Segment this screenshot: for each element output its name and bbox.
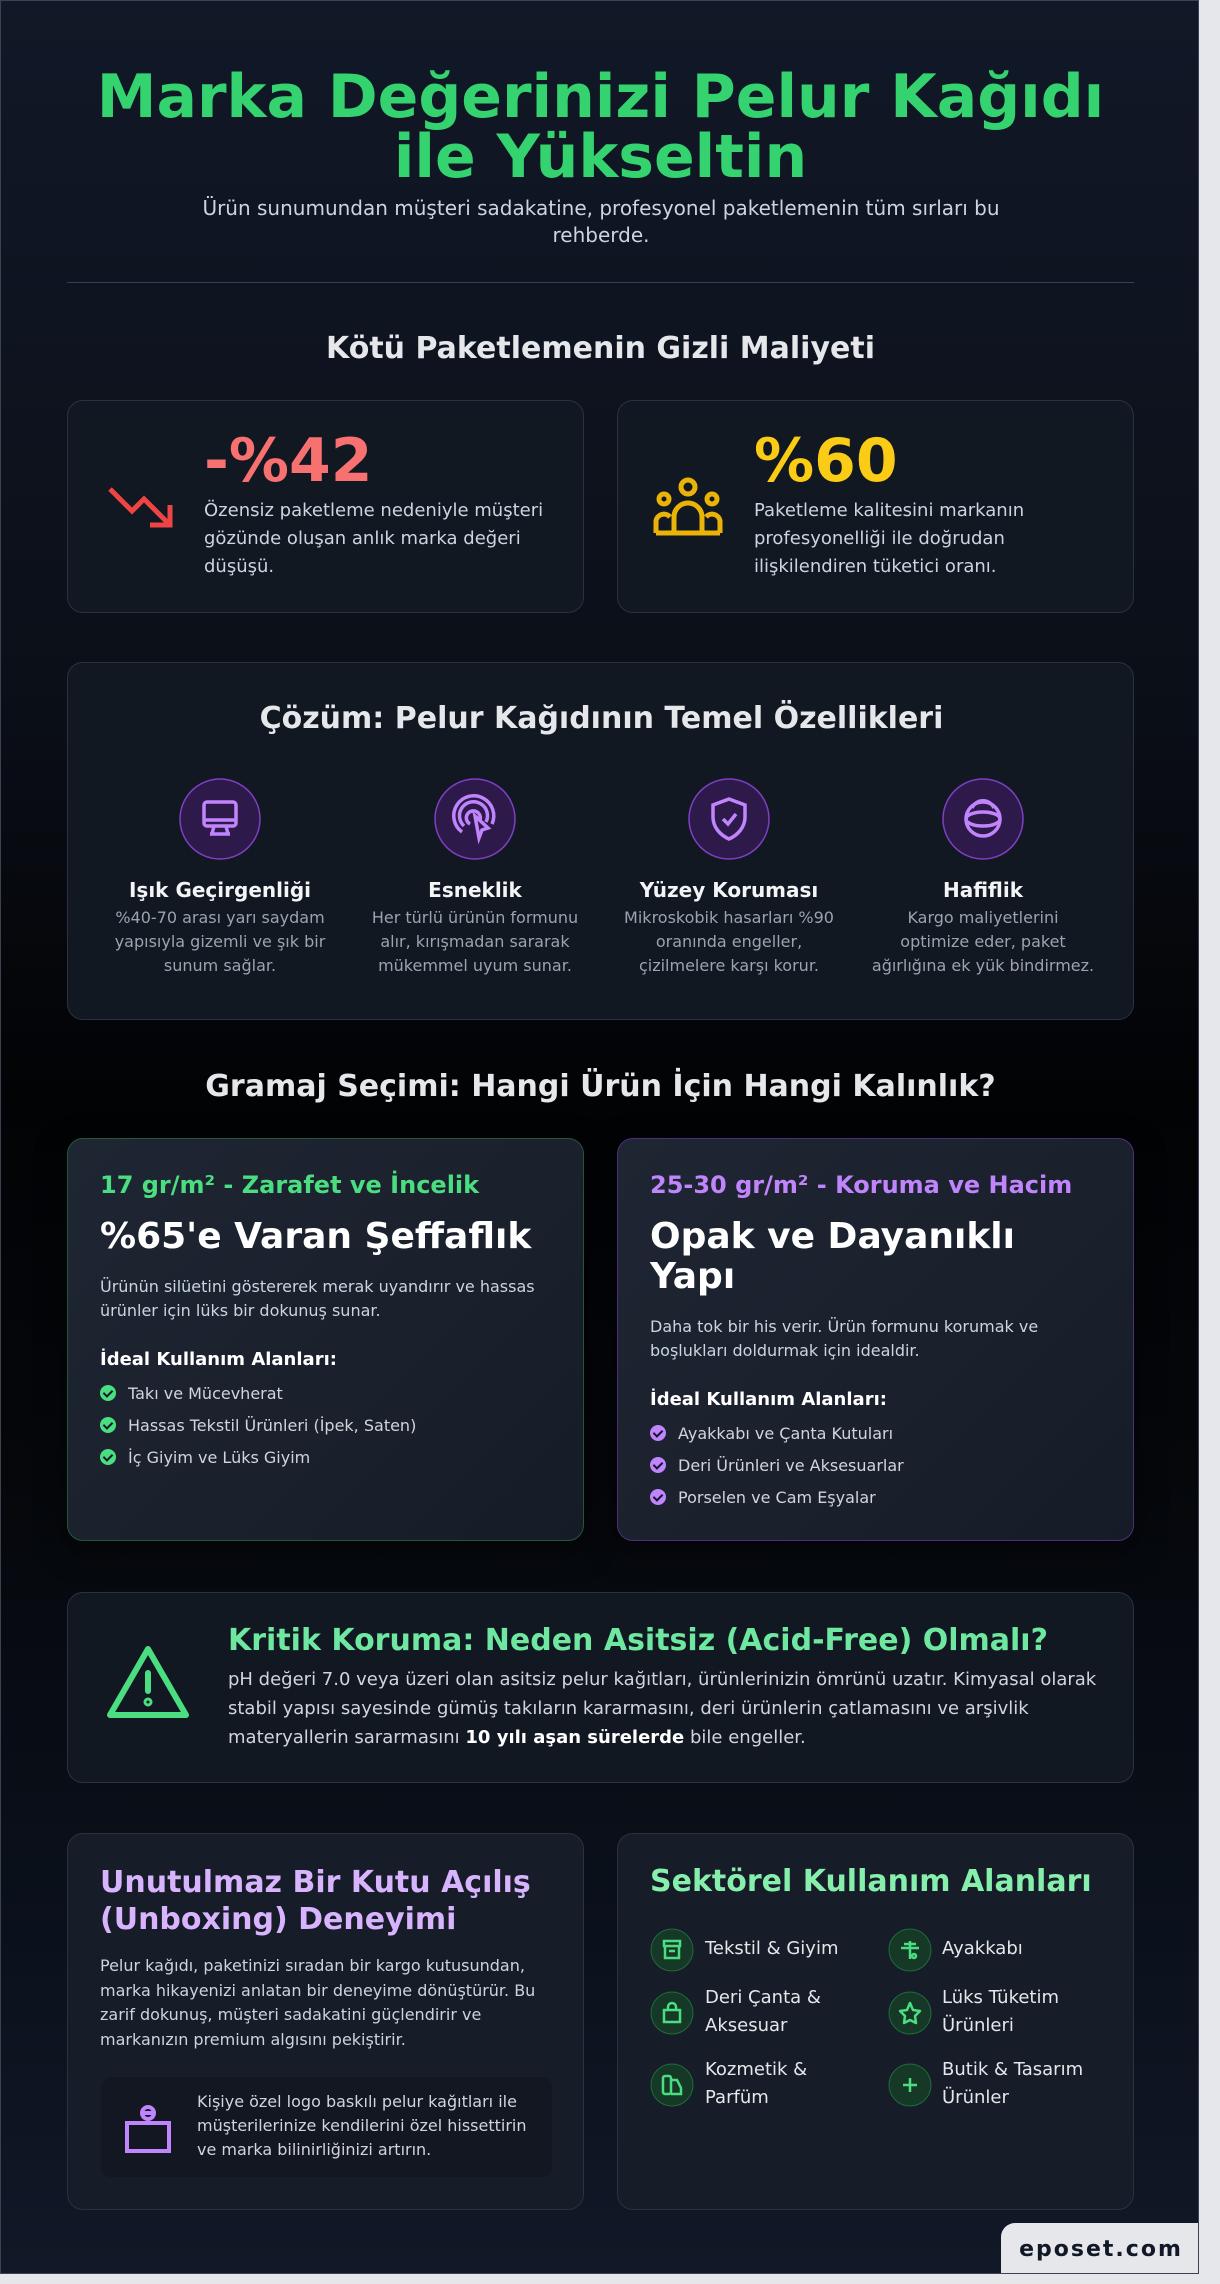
subtitle green: 17 gr/m² - Zarafet ve İncelik [100,1171,479,1199]
badge: eposet.com: eposet.com [1019,2237,1183,2262]
icon: trending down [108,487,172,528]
sector items: Ürünler [942,2087,1009,2108]
card: -42% [67,400,584,613]
subtitle: Ürün sunumundan müşteri sadakatine, profesyonel paketlemenin tüm sırları bu rehberde. [202,196,1000,247]
sector items: Kozmetik & [705,2059,807,2080]
sector items: Ürünleri [942,2015,1014,2036]
card: unboxing [67,1833,584,2210]
feature: flex: Her türlü ürünün formunu alır, kırışmadan sararak mükemmel uyum sunar. [372,908,578,975]
feature: light weight: ağırlığına ek yük bindirmez. [872,956,1094,975]
list [100,1384,416,1467]
title [97,62,1104,192]
feature: surface: Mikroskobik hasarları %90 oranında engeller, çizilmelere karşı korur. [624,908,834,975]
card: 25-30 gsm: İdeal Kullanım Alanları: [650,1389,887,1410]
feature: light weight: Kargo maliyetlerini [907,908,1059,927]
text: Kritik Koruma: Neden Asitsiz (Acid-Free) Olmalı? [228,1623,1048,1658]
sector items: Deri Çanta & [705,1987,821,2008]
title: Marka Değerinizi Pelur Kağıdı [97,62,1104,132]
feature: light weight [872,778,1094,975]
panel: acid-free [67,1592,1134,1783]
list: İç Giyim ve Lüks Giyim [128,1448,310,1467]
feature: flex: Esneklik [428,878,522,902]
badge: eposet.com [1001,2223,1201,2276]
sector items: Tekstil & Giyim [705,1938,838,1959]
feature: surface [624,778,834,975]
card: 25-30 gsm: Opak ve Dayanıklı [650,1216,1015,1257]
icon: warning [107,1646,189,1718]
feature: surface: Yüzey Koruması [640,878,818,902]
card: sectors [617,1833,1134,2210]
sector items [650,1928,1083,2108]
text: pH değeri 7.0 veya üzeri olan asitsiz pelur kağıtları, ürünlerinizin ömrünü uzatır. Kimyasal olarak stabil yapısı sayesinde gümüş takıların kararmasını, deri ürünlerin çatlamasını ve arşivlik materyallerin sararmasını 10 yılı aşan sürelerde bile engeller. [228,1669,1096,1748]
heading: grammage: Gramaj Seçimi: Hangi Ürün İçin Hangi Kalınlık? [205,1069,996,1104]
card: 25-30 gsm: Ayakkabı ve Çanta Kutuları [678,1424,893,1443]
feature: light: %40-70 arası yarı saydam yapısıyla gizemli ve şık bir sunum sağlar. [115,908,325,975]
sector items: Aksesuar [705,2015,787,2036]
callout: logo printing: Kişiye özel logo baskılı pelur kağıtları ile müşterilerinize kendilerini özel hissettirin ve marka bilinirliğinizi artırın. [197,2092,527,2159]
feature: light weight: optimize eder, paket [900,932,1066,951]
stat text: -%42 [204,426,373,496]
list: Takı ve Mücevherat [128,1384,283,1403]
card: 60% [617,400,1134,613]
card: 25-30 gsm: Daha tok bir his verir. Ürün formunu korumak ve boşlukları doldurmak için idealdir. [650,1317,1038,1360]
sector items: Lüks Tüketim [942,1987,1059,2008]
list: Hassas Tekstil Ürünleri (İpek, Saten) [128,1416,416,1435]
stat text [204,426,543,577]
title: ile Yükseltin [394,122,807,192]
text [228,1623,1096,1748]
feature: light weight: Hafiflik [943,878,1023,902]
card: 25-30 gsm: 25-30 gr/m² - Koruma ve Hacim [650,1171,1072,1199]
sector items: Butik & Tasarım [942,2059,1083,2080]
card: 25-30 gsm: Porselen ve Cam Eşyalar [678,1488,876,1507]
stat text: %60 [754,426,898,496]
card: 17 gsm: Ürünün silüetini göstererek merak uyandırır ve hassas ürünler için lüks bir dokunuş sunar. [100,1277,535,1320]
card: 25-30 gsm: Yapı [650,1256,735,1297]
heading: Çözüm: Pelur Kağıdının Temel Özellikleri [260,701,943,736]
card: unboxing: Pelur kağıdı, paketinizi sıradan bir kargo kutusundan, marka hikayenizi anlatan bir deneyime dönüştürür. Bu zarif dokunuş, müşteri sadakatini güçlendirir ve markanızın premium algısını pekiştirir. [100,1956,535,2048]
card: 25-30 gsm: Deri Ürünleri ve Aksesuarlar [678,1456,904,1475]
sector items: Ayakkabı [942,1938,1023,1959]
sector items: Parfüm [705,2087,769,2108]
big title: %65'e Varan Şeffaflık [100,1216,531,1257]
callout: logo printing [101,2077,552,2177]
card: 17 gsm [67,1138,584,1541]
card: unboxing: Unutulmaz Bir Kutu Açılış (Unboxing) Deneyimi [100,1865,531,1937]
feature: flex [372,778,578,975]
icon: people [654,478,722,536]
panel: solution features [67,662,1134,1020]
feature: light: Işık Geçirgenliği [129,878,311,902]
stat text: Özensiz paketleme nedeniyle müşteri gözünde oluşan anlık marka değeri düşüşü. [204,500,543,577]
stat text [754,426,1024,577]
stat text: Paketleme kalitesini markanın profesyonelliği ile doğrudan ilişkilendiren tüketici oranı. [754,500,1024,577]
card: 17 gsm: İdeal Kullanım Alanları: [100,1349,337,1370]
card: 25-30 gsm [617,1138,1134,1541]
card: sectors: Sektörel Kullanım Alanları [650,1864,1092,1899]
heading: hidden cost: Kötü Paketlemenin Gizli Maliyeti [326,331,875,366]
feature: light [115,778,326,975]
